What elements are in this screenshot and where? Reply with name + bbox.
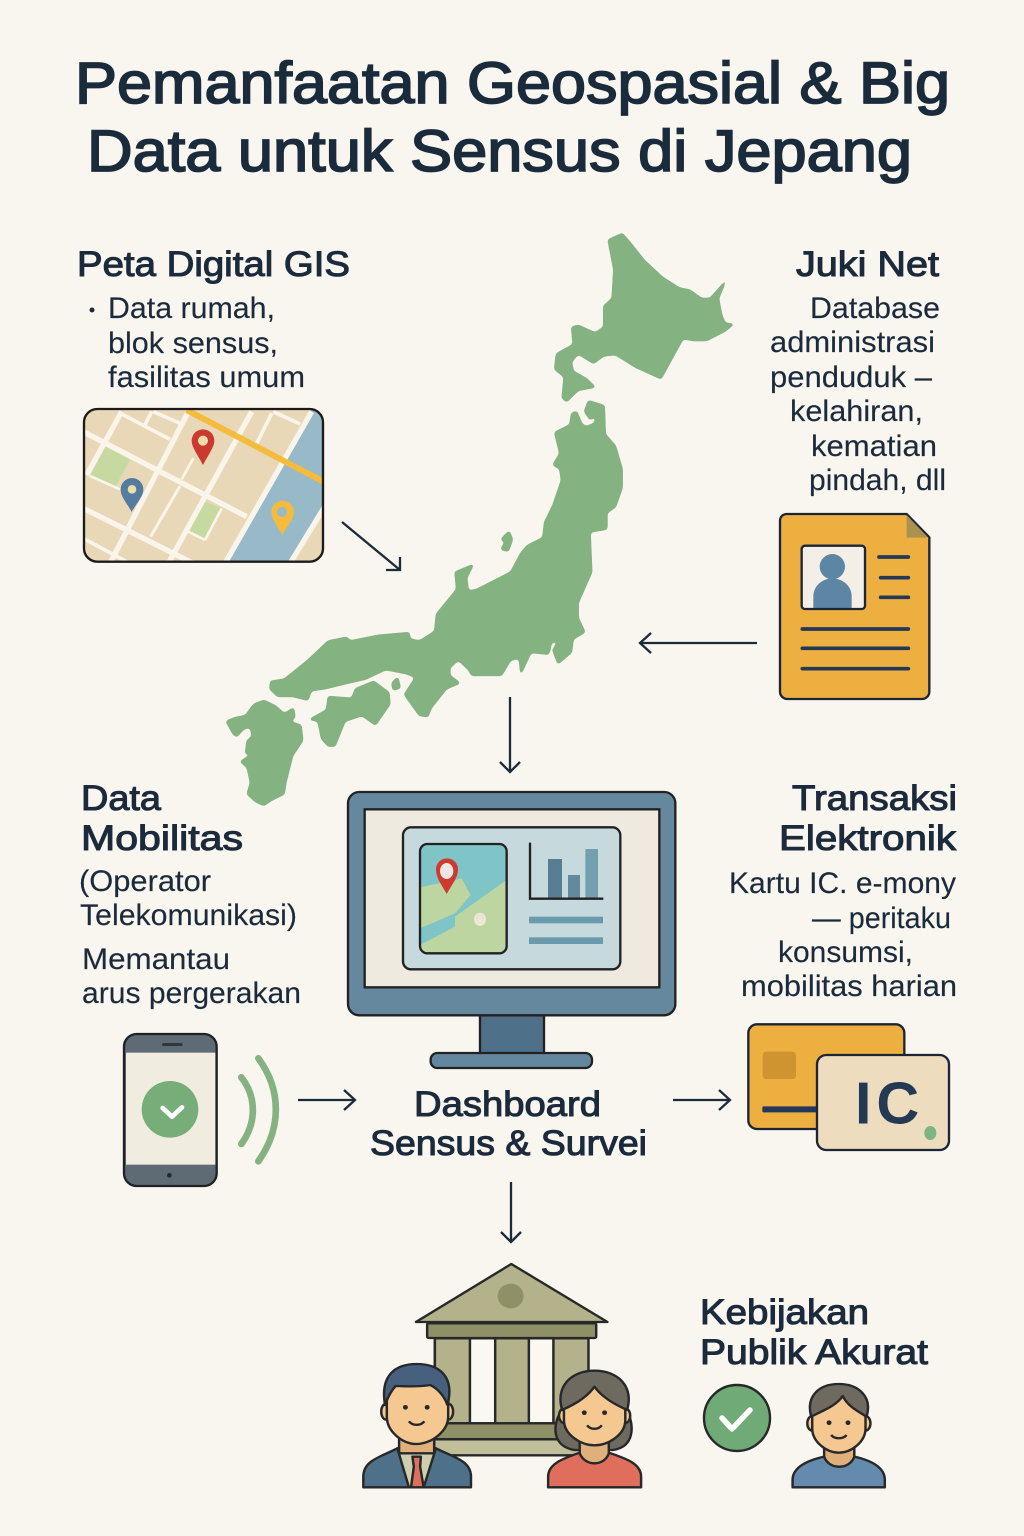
icon: IC cards <box>748 1024 949 1150</box>
panel: Transaksi Elektronik text: konsumsi, <box>778 936 913 969</box>
title <box>75 51 950 184</box>
heading: Kebijakan Publik Akurat <box>700 1293 928 1372</box>
arrow: Juki Net to Japan <box>640 633 757 653</box>
panel: Juki Net text <box>770 245 946 497</box>
panel: Juki Net text: penduduk – <box>770 361 932 394</box>
panel: Peta Digital GIS text: Data rumah, <box>108 292 275 325</box>
panel: Data Mobilitas text: Mobilitas <box>81 819 243 858</box>
icon: street map with pins <box>83 409 327 563</box>
panel: Data Mobilitas text: arus pergerakan <box>82 977 301 1010</box>
map of Japan <box>226 233 734 806</box>
panel: Transaksi Elektronik text: Elektronik <box>779 819 957 858</box>
icon: IC cards: I <box>855 1069 871 1136</box>
heading: dashboard <box>370 1085 647 1163</box>
panel: Transaksi Elektronik text: Kartu IC. e-mony <box>729 867 956 900</box>
icon: smartphone with signal <box>124 1034 276 1186</box>
panel: Data Mobilitas text <box>79 779 301 1010</box>
panel: Data Mobilitas text: Telekomunikasi) <box>80 899 297 932</box>
arrow: map to Japan <box>342 522 400 570</box>
title: Pemanfaatan Geospasial & Big <box>75 51 950 116</box>
icon: resident document <box>780 514 929 699</box>
arrow: phone to dashboard <box>298 1090 355 1110</box>
building <box>416 1264 607 1455</box>
icon: check badge <box>704 1385 770 1451</box>
icon: IC cards: C <box>876 1069 919 1136</box>
panel: Data Mobilitas text: Data <box>81 779 162 818</box>
icon: government building with people <box>363 1264 641 1487</box>
dashboard map <box>420 844 507 955</box>
icon: yellow pin <box>271 501 294 535</box>
panel: Juki Net text: Database <box>810 292 940 325</box>
woman <box>548 1371 641 1487</box>
panel: Peta Digital GIS text: blok sensus, <box>108 327 278 360</box>
icon: red pin <box>192 429 214 465</box>
title: Data untuk Sensus di Jepang <box>87 119 912 184</box>
panel: Data Mobilitas text: (Operator <box>79 865 211 898</box>
panel: Peta Digital GIS text <box>77 245 350 394</box>
heading: dashboard: Sensus & Survei <box>370 1124 647 1163</box>
panel: Juki Net text: pindah, dll <box>809 464 946 497</box>
panel: Peta Digital GIS text: Peta Digital GIS <box>77 245 350 284</box>
panel: Transaksi Elektronik text: Transaksi <box>792 779 957 818</box>
heading: Kebijakan Publik Akurat: Publik Akurat <box>700 1333 928 1372</box>
panel: Transaksi Elektronik text: — peritaku <box>812 902 951 935</box>
dashboard bar chart <box>530 843 603 899</box>
icon: blue pin <box>121 478 143 512</box>
panel: Transaksi Elektronik text: mobilitas harian <box>741 970 957 1003</box>
man <box>363 1364 471 1487</box>
heading: dashboard: Dashboard <box>414 1085 601 1124</box>
icon: citizen <box>793 1384 885 1487</box>
panel: Peta Digital GIS text: fasilitas umum <box>108 361 305 394</box>
arrow: dashboard to policy <box>501 1182 521 1242</box>
icon: dashboard monitor <box>348 792 675 1068</box>
arrow: Japan to dashboard <box>500 697 520 772</box>
panel: Juki Net text: kelahiran, <box>790 395 923 428</box>
panel: Juki Net text: administrasi <box>770 326 935 359</box>
arrow: dashboard to cards <box>673 1090 730 1110</box>
panel: Transaksi Elektronik text <box>729 779 957 1003</box>
panel: Data Mobilitas text: Memantau <box>82 943 230 976</box>
heading: Kebijakan Publik Akurat: Kebijakan <box>700 1293 869 1332</box>
panel: Juki Net text: kematian <box>811 430 937 463</box>
panel: Juki Net text: Juki Net <box>796 245 939 284</box>
